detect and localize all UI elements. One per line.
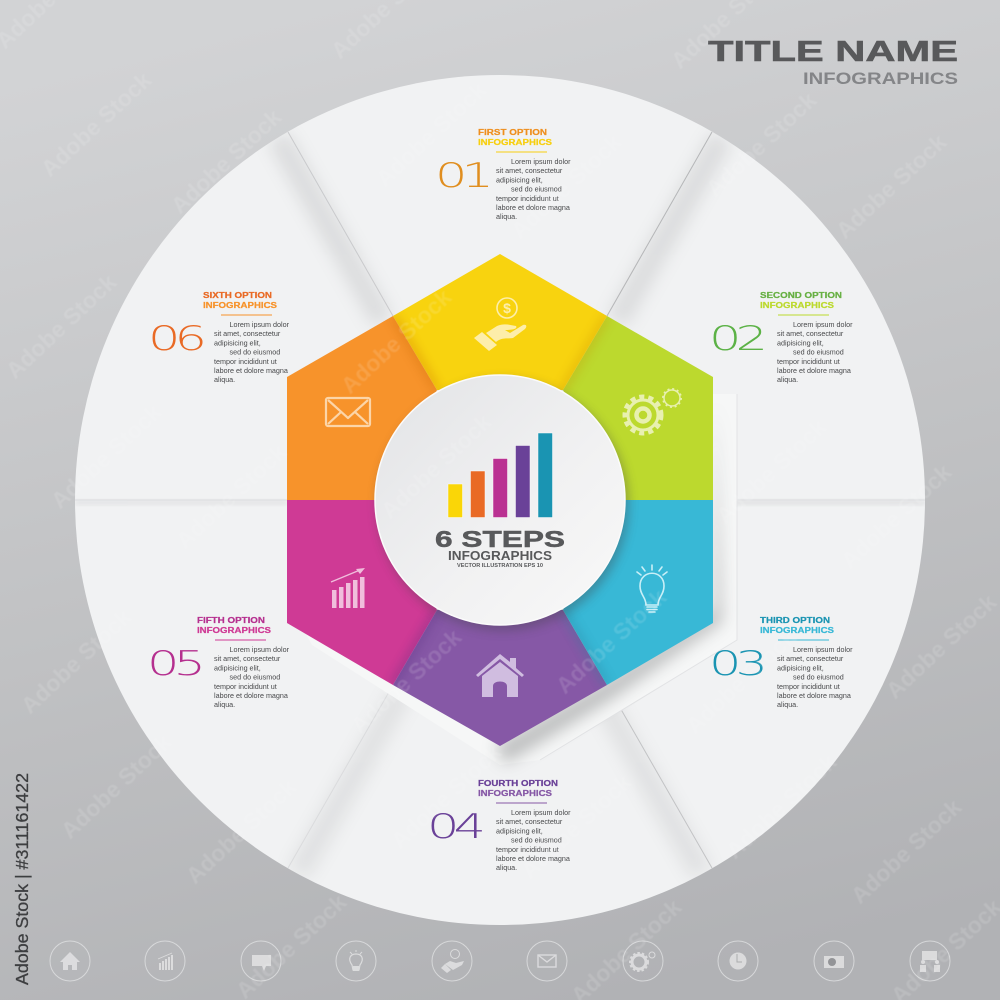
watermarks: Adobe Stock bbox=[846, 794, 966, 909]
body text 04: sed do eiusmod bbox=[511, 836, 562, 845]
heading 05: FIFTH OPTION bbox=[197, 615, 265, 625]
bottom icon row bbox=[50, 941, 950, 981]
segment: green bbox=[563, 316, 713, 500]
small icon: chart bbox=[158, 953, 173, 970]
step 03: INFOGRAPHICS bbox=[760, 625, 834, 635]
watermarks: Adobe Stock bbox=[711, 414, 831, 529]
raised backing hexagon bbox=[287, 394, 737, 765]
caption: vector illustration: VECTOR ILLUSTRATION EPS 10 bbox=[457, 563, 543, 569]
body text 04: tempor incididunt ut bbox=[496, 845, 559, 854]
step 01 bbox=[435, 127, 571, 221]
heading 02: SECOND OPTION bbox=[760, 290, 842, 300]
watermarks: Adobe Stock bbox=[56, 729, 176, 844]
icon: house bbox=[476, 654, 524, 697]
small icon: house bbox=[60, 952, 80, 970]
number 04: 04 bbox=[427, 807, 483, 847]
body text 05: sed do eiusmod bbox=[230, 673, 280, 682]
small icon: clock bbox=[730, 952, 746, 970]
body text 06: tempor incididunt ut bbox=[214, 357, 277, 366]
heading 03: THIRD OPTION bbox=[760, 615, 830, 625]
body text 02: tempor incididunt ut bbox=[777, 357, 840, 366]
body text 06: Lorem ipsum dolor bbox=[230, 320, 290, 329]
body text 02: sed do eiusmod bbox=[793, 348, 844, 357]
body text 01: labore et dolore magna bbox=[496, 203, 570, 212]
body text 05: adipisicing elit, bbox=[214, 663, 261, 672]
body text 01: sit amet, consectetur bbox=[496, 166, 563, 175]
number 05: 05 bbox=[147, 644, 201, 684]
icon: light bulb bbox=[637, 565, 667, 612]
body text 03: sit amet, consectetur bbox=[777, 654, 844, 663]
title: TITLE NAME bbox=[708, 36, 958, 68]
step 04 bbox=[427, 778, 571, 872]
panel: outer circle of six sectors bbox=[75, 75, 925, 925]
chart: five rising bars bbox=[448, 433, 552, 518]
watermarks: Adobe Stock bbox=[721, 749, 841, 864]
body text 02: labore et dolore magna bbox=[777, 366, 851, 375]
body text 05: sit amet, consectetur bbox=[214, 654, 281, 663]
watermarks: Adobe Stock bbox=[171, 439, 291, 554]
small icon: bulb bbox=[350, 950, 362, 971]
body text 04: Lorem ipsum dolor bbox=[511, 808, 571, 817]
watermarks: Adobe Stock bbox=[551, 584, 671, 699]
small icon: speech bubble bbox=[252, 955, 271, 971]
body text 05: labore et dolore magna bbox=[214, 691, 288, 700]
step 06: INFOGRAPHICS bbox=[203, 300, 277, 310]
body text 05: Lorem ipsum dolor bbox=[230, 645, 290, 654]
watermarks: Adobe Stock bbox=[831, 129, 951, 244]
watermarks: Adobe Stock bbox=[16, 604, 136, 719]
watermarks: Adobe Stock bbox=[36, 67, 156, 182]
watermarks: Adobe Stock bbox=[836, 459, 956, 574]
body text 04: labore et dolore magna bbox=[496, 854, 570, 863]
body text 01: adipisicing elit, bbox=[496, 175, 543, 184]
step 03 bbox=[709, 615, 853, 709]
watermarks: Adobe Stock bbox=[701, 87, 821, 202]
body text 01: tempor incididunt ut bbox=[496, 194, 559, 203]
segment: blue bbox=[563, 500, 713, 685]
segment: purple bbox=[393, 610, 607, 746]
body text 03: labore et dolore magna bbox=[777, 691, 851, 700]
number 03: 03 bbox=[709, 644, 764, 684]
step 01: INFOGRAPHICS bbox=[478, 137, 552, 147]
body text 06: labore et dolore magna bbox=[214, 366, 288, 375]
segment: pink bbox=[287, 500, 437, 685]
step 05 bbox=[147, 615, 290, 709]
title block bbox=[708, 36, 958, 88]
body text 06: sit amet, consectetur bbox=[214, 329, 281, 338]
watermarks: Adobe Stock bbox=[346, 624, 466, 739]
body text 05: aliqua. bbox=[214, 700, 235, 709]
step 02 bbox=[709, 290, 853, 384]
watermarks: Adobe Stock bbox=[376, 409, 496, 524]
body text 06: adipisicing elit, bbox=[214, 338, 261, 347]
icon: hand with coin bbox=[474, 298, 526, 351]
step 06 bbox=[148, 290, 290, 384]
segment: orange bbox=[287, 316, 437, 500]
body text 02: aliqua. bbox=[777, 375, 798, 384]
heading 01: FIRST OPTION bbox=[478, 127, 547, 137]
body text 06: aliqua. bbox=[214, 375, 235, 384]
body text 03: Lorem ipsum dolor bbox=[793, 645, 853, 654]
step 02: INFOGRAPHICS bbox=[760, 300, 834, 310]
icon: gears bbox=[625, 389, 681, 433]
icon: hand with coin: $ bbox=[503, 300, 511, 316]
watermarks: Adobe Stock bbox=[681, 624, 801, 739]
body text 02: sit amet, consectetur bbox=[777, 329, 844, 338]
small icon: money bbox=[824, 956, 844, 968]
number 01: 01 bbox=[435, 156, 489, 196]
watermarks: Adobe Stock bbox=[181, 774, 301, 889]
subheading: infographics: INFOGRAPHICS bbox=[448, 549, 552, 563]
small icon: envelope bbox=[538, 955, 556, 967]
step 04: INFOGRAPHICS bbox=[478, 788, 552, 798]
watermarks: Adobe Stock bbox=[881, 589, 1000, 704]
step 05: INFOGRAPHICS bbox=[197, 625, 271, 635]
watermarks: Adobe Stock bbox=[516, 769, 636, 884]
heading 06: SIXTH OPTION bbox=[203, 290, 272, 300]
body text 05: tempor incididunt ut bbox=[214, 682, 277, 691]
body text 04: sit amet, consectetur bbox=[496, 817, 563, 826]
body text 03: sed do eiusmod bbox=[793, 673, 844, 682]
body text 04: aliqua. bbox=[496, 863, 517, 872]
body text 06: sed do eiusmod bbox=[230, 348, 280, 357]
number 06: 06 bbox=[148, 319, 203, 359]
watermarks: Adobe Stock bbox=[386, 739, 506, 854]
number 02: 02 bbox=[709, 319, 764, 359]
watermarks: Adobe Stock bbox=[1, 269, 121, 384]
panel: centre circle bbox=[375, 375, 629, 631]
segment: yellow bbox=[393, 254, 607, 390]
body text 03: aliqua. bbox=[777, 700, 798, 709]
body text 03: adipisicing elit, bbox=[777, 663, 824, 672]
subtitle: INFOGRAPHICS bbox=[803, 70, 958, 88]
icon: envelope bbox=[326, 398, 370, 426]
body text 01: aliqua. bbox=[496, 212, 517, 221]
small icon: gears bbox=[630, 952, 655, 971]
watermarks: Adobe Stock bbox=[336, 284, 456, 399]
body text 01: Lorem ipsum dolor bbox=[511, 157, 571, 166]
heading: 6 steps: 6 STEPS bbox=[435, 526, 565, 552]
watermarks: Adobe Stock bbox=[166, 104, 286, 219]
panel: coloured hexagon bbox=[287, 254, 713, 746]
body text 04: adipisicing elit, bbox=[496, 826, 543, 835]
body text 02: Lorem ipsum dolor bbox=[793, 320, 853, 329]
watermarks: Adobe Stock bbox=[506, 129, 626, 244]
body text 02: adipisicing elit, bbox=[777, 338, 824, 347]
icon: rising bar chart bbox=[331, 568, 365, 608]
small icon: hand with coin bbox=[441, 950, 464, 973]
heading 04: FOURTH OPTION bbox=[478, 778, 558, 788]
body text 03: tempor incididunt ut bbox=[777, 682, 840, 691]
small icon: people talking bbox=[920, 951, 940, 972]
watermarks: Adobe Stock bbox=[371, 77, 491, 192]
vertical stock id: Adobe Stock | #311161422 bbox=[12, 773, 32, 985]
watermarks: Adobe Stock bbox=[46, 399, 166, 514]
body text 01: sed do eiusmod bbox=[511, 185, 562, 194]
